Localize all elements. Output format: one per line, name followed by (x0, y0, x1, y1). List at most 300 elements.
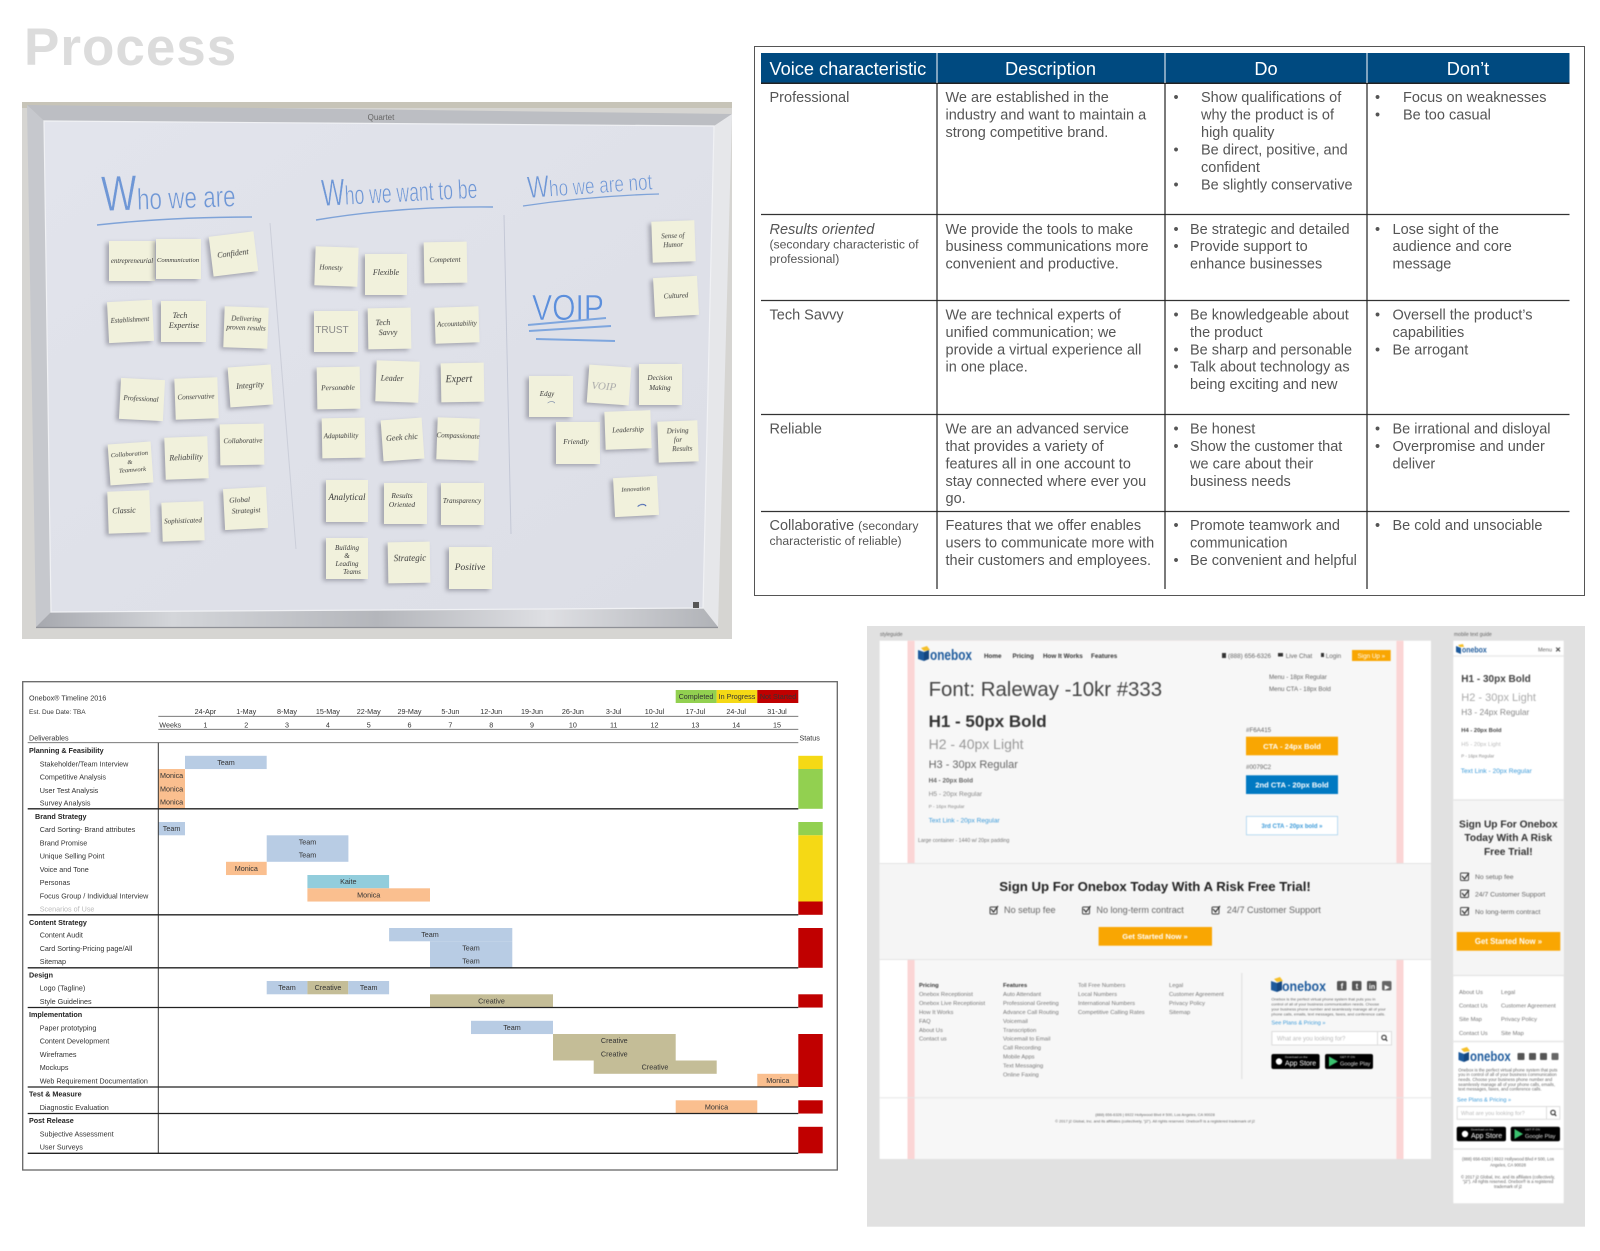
row: Professional: • (1375, 108, 1380, 124)
mobile header (1456, 644, 1561, 654)
app store badges: Download on the (1471, 1128, 1494, 1132)
row: Results oriented: message (1392, 256, 1451, 272)
date and week axis: 1-May (236, 707, 257, 716)
deliverables list: Stakeholder/Team Interview (40, 759, 129, 768)
row: Professional: We are established in the (946, 90, 1109, 106)
sticky notes: who we want to be: Analytical (328, 492, 366, 502)
menu notes (1269, 674, 1331, 693)
deliverables list: Sitemap (40, 957, 66, 966)
sticky notes: who we are not: Edgy (539, 390, 555, 398)
gantt title: Onebox® Timeline 2016 (29, 694, 106, 702)
footer links: Transcription (1003, 1028, 1036, 1034)
date and week axis: 19-Jun (521, 707, 543, 716)
mobile footer links: Site Map (1501, 1031, 1524, 1037)
sticky notes: who we are not: Results (671, 444, 693, 453)
mobile header: ✕ (1555, 647, 1561, 654)
logo: onebox (918, 646, 973, 664)
panel: desktop styleguide: styleguide (880, 632, 903, 638)
mobile brand block: you in control of all of your business communication (1458, 1072, 1557, 1077)
row: Tech Savvy: Tech Savvy (770, 308, 844, 324)
status legend (676, 690, 798, 703)
date and week axis: 6 (408, 720, 412, 730)
mobile brand block: Onebox is the perfect virtual phone system that puts (1458, 1068, 1557, 1072)
mobile footer links: Contact Us (1459, 1004, 1488, 1010)
mobile footer links: About Us (1459, 990, 1483, 996)
app store badges: GET IT ON (1525, 1128, 1540, 1132)
social icons: f (1341, 982, 1344, 991)
deliverables list: Competitive Analysis (40, 772, 106, 782)
app store badges (1457, 1127, 1560, 1141)
mobile footer links: Site Map (1459, 1017, 1482, 1023)
sticky notes: who we want to be: Competent (429, 256, 462, 264)
deliverables list: Focus Group / Individual Interview (40, 891, 149, 900)
gantt bars: Creative (601, 1049, 628, 1058)
sticky notes: who we are not: Leadership (611, 425, 644, 435)
footer links: Professional Greeting (1003, 1001, 1059, 1007)
app store badges: Google Play (1340, 1062, 1371, 1068)
date and week axis: 29-May (398, 707, 422, 716)
deliverables list: Style Guidelines (40, 997, 92, 1006)
gantt bars: Monica (705, 1102, 728, 1111)
deliverables list: Subjective Assessment (40, 1129, 114, 1138)
sticky notes: who we are: Tech (173, 311, 187, 320)
row: Reliable: • (1375, 439, 1380, 455)
deliverables list: Wireframes (40, 1050, 77, 1059)
deliverables list: Paper prototyping (40, 1023, 96, 1032)
row: Professional: industry and want to maintain a (946, 108, 1147, 124)
date and week axis: Weeks (159, 720, 182, 730)
table header row: Do (1254, 59, 1278, 79)
sticky notes: who we are: Expertise (168, 321, 200, 330)
social icons: t (1356, 982, 1359, 991)
sticky notes: who we are not: VOIP (591, 380, 617, 394)
row: Tech Savvy: Be arrogant (1392, 342, 1468, 358)
icon: checkbox (1212, 906, 1220, 914)
mobile type specimen: Text Link - 20px Regular (1461, 768, 1533, 775)
gantt bars: Team (299, 837, 316, 846)
deliverables list: Content Development (40, 1036, 109, 1046)
mobile type specimen: H3 - 24px Regular (1461, 707, 1529, 717)
mobile footer links: Contact Us (1459, 1031, 1488, 1037)
app store badges: Download on the (1285, 1055, 1308, 1059)
sticky notes: who we are not: Driving (666, 427, 689, 435)
app store badges: App Store (1471, 1133, 1502, 1140)
sticky notes: who we are: Collaboration (111, 450, 149, 459)
sticky notes: who we are: entrepreneurial (111, 258, 153, 265)
handwriting: VOIP: VOIP (532, 287, 604, 328)
mobile legal text: "j2"). All rights reserved. Onebox® is a registered (1463, 1179, 1554, 1184)
sticky notes: who we are not: ⌒ (546, 401, 556, 410)
date and week axis: 15 (773, 720, 781, 730)
row: Results oriented (770, 222, 1512, 272)
row: Reliable: features all in one account to (946, 456, 1131, 472)
footer brand block: your business phone number and seamlessly manage all of your (1271, 1006, 1386, 1011)
deliverables list: Mockups (40, 1063, 69, 1072)
row: Tech Savvy: • (1375, 342, 1380, 358)
date and week axis: 22-May (357, 707, 381, 716)
gantt bars: Creative (601, 1036, 628, 1045)
row: Professional: • (1375, 90, 1380, 106)
row: Tech Savvy (770, 308, 1532, 393)
row: Professional: why the product is of (1200, 108, 1335, 124)
row: Collaborative: Collaborative (secondary (770, 518, 919, 534)
mobile brand block: needs. Choose your business phone number and (1458, 1077, 1553, 1082)
desktop nav bar (918, 646, 1391, 664)
date and week axis: 10 (569, 720, 577, 730)
row: Tech Savvy: Talk about technology as (1190, 360, 1350, 376)
gantt bars: Creative (315, 983, 341, 992)
row: Collaborative: users to communicate more with (946, 536, 1154, 552)
status legend: Completed (679, 692, 713, 701)
row: Reliable: business needs (1190, 474, 1291, 490)
row: Results oriented: • (1375, 222, 1380, 238)
status legend: Not Started (760, 692, 796, 701)
sticky notes: who we are: & (127, 459, 134, 466)
row: Professional: high quality (1201, 125, 1275, 141)
status column (798, 756, 823, 1153)
date and week axis: 11 (610, 720, 617, 730)
mobile sign up block: No setup fee (1475, 874, 1514, 881)
panel: whiteboard photo (22, 102, 732, 639)
date and week axis: 10-Jul (645, 707, 665, 716)
sign up call to action band: 24/7 Customer Support (1227, 905, 1321, 915)
type specimen: H1 - 50px Bold (929, 712, 1047, 731)
social icons (1337, 981, 1392, 991)
footer links: Contact us (919, 1037, 947, 1043)
row: Reliable: • (1174, 439, 1179, 455)
button specimens: #F6A415 (1246, 727, 1272, 734)
type specimen: Text Link - 20px Regular (929, 818, 1001, 824)
mobile sign up block: No long-term contract (1475, 909, 1540, 916)
desktop nav bar: Sign Up » (1357, 653, 1386, 660)
row: Tech Savvy: being exciting and new (1190, 377, 1338, 393)
sticky notes: who we are not: Decision (647, 374, 673, 382)
icon: checkbox (990, 906, 998, 914)
deliverables list: Scenarios of Use (40, 904, 94, 914)
row: Collaborative: • (1174, 553, 1179, 569)
sticky notes: who we want to be: Oriented (389, 500, 415, 509)
mobile legal text: trademark of j2 (1494, 1184, 1523, 1189)
footer links: Online Faxing (1003, 1073, 1039, 1079)
gantt bars: Monica (160, 798, 183, 806)
row: Tech Savvy: Be knowledgeable about (1190, 308, 1349, 324)
mobile footer links: Legal (1501, 990, 1515, 996)
gantt due date: Est. Due Date: TBA (29, 709, 86, 716)
sticky notes: who we want to be: & (344, 552, 350, 560)
icon: checkbox (1082, 906, 1090, 914)
row: Collaborative: Promote teamwork and (1190, 518, 1340, 534)
row: Results oriented: audience and core (1392, 239, 1512, 255)
sticky notes: who we want to be: Positive (454, 563, 485, 573)
menu notes: Menu - 18px Regular (1269, 674, 1327, 681)
type specimen: H4 - 20px Bold (929, 778, 973, 784)
sticky notes: who we are: Strategist (232, 505, 262, 516)
sticky notes: who we are: Teamwork (119, 466, 147, 475)
footer links: Customer Agreement (1169, 992, 1224, 998)
row: Professional: • (1174, 90, 1179, 106)
search box: What are you looking for? (1461, 1111, 1525, 1117)
row: Reliable: that provides a variety of (946, 439, 1104, 455)
sticky notes: who we are: Professional (122, 394, 159, 404)
date and week axis (28, 707, 820, 743)
type specimen: H2 - 40px Light (929, 736, 1024, 752)
sticky notes: who we want to be: Teams (343, 568, 361, 576)
mobile sign up block: 24/7 Customer Support (1475, 892, 1545, 898)
panel: styleguide background (867, 626, 1585, 1227)
row: Results oriented: • (1174, 222, 1179, 238)
footer links: Onebox Live Receptionist (919, 1001, 985, 1007)
sign up call to action band: No setup fee (1004, 905, 1056, 915)
footer links: Local Numbers (1078, 992, 1117, 998)
icon: checkbox (1460, 908, 1469, 915)
sticky notes: who we are: Reliability (168, 452, 203, 463)
footer links: How It Works (919, 1010, 953, 1016)
legal text: © 2017 j2 Global, Inc. and its affiliates (collectively, "j2"). All rights reserved. Onebox® is a registered trademark of j2 (1055, 1118, 1255, 1124)
sign up call to action band: No long-term contract (1096, 905, 1184, 915)
date and week axis: 3 (285, 720, 289, 730)
row: Results oriented: business communications more (946, 239, 1149, 255)
date and week axis: 9 (530, 720, 534, 730)
button specimens: 2nd CTA - 20px Bold (1255, 780, 1329, 790)
sticky notes: who we are not: ⌒ (636, 503, 647, 514)
desktop nav bar: (888) 656-6326 (1228, 653, 1272, 660)
panel: project timeline gantt chart (23, 682, 837, 1170)
date and week axis: 5-Jun (441, 707, 459, 716)
footer links: Toll Free Numbers (1078, 983, 1125, 989)
sticky notes: who we want to be: Tech (375, 318, 390, 327)
mobile footer links: Privacy Policy (1501, 1017, 1537, 1023)
footer links: Text Messaging (1003, 1064, 1043, 1070)
date and week axis: 8 (489, 720, 493, 730)
search box: What are you looking for? (1277, 1036, 1346, 1042)
mobile footer links: Customer Agreement (1501, 1004, 1556, 1010)
footer links: Pricing (919, 983, 939, 989)
sticky notes: who we want to be: Strategic (394, 553, 426, 563)
desktop nav bar: Live Chat (1286, 653, 1313, 660)
gantt bars: Team (299, 850, 316, 860)
row: Professional: • (1174, 142, 1179, 158)
footer links: Voicemail to Email (1003, 1037, 1050, 1043)
mobile legal text (1461, 1156, 1555, 1189)
gantt bars: Monica (235, 864, 258, 873)
footer links: Legal (1169, 983, 1183, 989)
type specimen: H5 - 20px Regular (929, 791, 983, 798)
row: Results oriented: We provide the tools to make (946, 222, 1133, 238)
row: Professional: Be slightly conservative (1201, 178, 1353, 194)
deliverables list: Card Sorting- Brand attributes (40, 825, 136, 834)
sticky notes: who we want to be: Compassionate (436, 431, 480, 441)
type specimen: Font: Raleway -10kr #333 (929, 679, 1162, 701)
mobile brand block: See Plans & Pricing » (1457, 1098, 1511, 1104)
sticky notes: who we are not: Humor (662, 241, 683, 249)
date and week axis: 1 (203, 720, 207, 730)
deliverables list: Unique Selling Point (40, 852, 104, 860)
deliverables list: Implementation (29, 1010, 82, 1019)
mobile sign up block: Get Started Now » (1475, 937, 1542, 946)
row: Results oriented: (secondary characteristic of (770, 238, 919, 252)
footer links: Call Recording (1003, 1046, 1041, 1052)
status legend: In Progress (719, 692, 756, 701)
row: Collaborative: communication (1190, 536, 1288, 552)
sticky notes: who we want to be: Personable (320, 383, 356, 392)
deliverables list: Content Audit (40, 930, 83, 940)
deliverables list: User Test Analysis (40, 786, 99, 795)
sticky notes: who we are: Collaborative (223, 437, 262, 445)
sticky notes: who we want to be: Savvy (379, 328, 398, 337)
date and week axis: 24-Apr (195, 707, 217, 716)
mobile type specimen: H4 - 20px Bold (1461, 728, 1502, 734)
deliverables list (29, 746, 149, 1152)
deliverables list: Voice and Tone (40, 865, 89, 874)
sticky notes: who we want to be: Geek chic (386, 432, 418, 443)
sign up call to action band (880, 863, 1431, 960)
deliverables list: Logo (Tagline) (40, 984, 85, 992)
deliverables list: Diagnostic Evaluation (40, 1103, 109, 1112)
mobile header: Menu (1538, 648, 1552, 654)
gantt bars: Monica (160, 771, 183, 780)
footer links: Advance Call Routing (1003, 1010, 1059, 1016)
heading: Who we are: Who we are (100, 161, 236, 222)
gantt bars: Team (462, 943, 480, 952)
row: Collaborative: Features that we offer enables (946, 518, 1141, 534)
row: Collaborative (770, 518, 1542, 569)
row: Results oriented: enhance businesses (1190, 256, 1322, 272)
panel: mobile styleguide (1453, 632, 1564, 1203)
sticky notes: who we are: proven results (225, 323, 266, 333)
row: Professional: Be too casual (1403, 108, 1491, 124)
row: Reliable (770, 422, 1550, 507)
sticky notes: who we are not: for (674, 436, 682, 444)
deliverables list: User Surveys (40, 1142, 83, 1152)
app store badges: GET IT ON (1340, 1055, 1355, 1059)
date and week axis: Deliverables (29, 734, 69, 742)
gantt bars (158, 756, 798, 1114)
row: Reliable: Be irrational and disloyal (1392, 422, 1550, 438)
row: Tech Savvy: Be sharp and personable (1190, 342, 1352, 358)
title: Process (24, 18, 237, 77)
sticky notes: who we are: Sophisticated (164, 516, 202, 526)
deliverables list: Post Release (29, 1116, 74, 1125)
row: Collaborative: their customers and employees. (946, 553, 1151, 569)
row: Results oriented: • (1174, 239, 1179, 255)
row: Results oriented: Results oriented (770, 222, 875, 238)
footer links: Mobile Apps (1003, 1055, 1035, 1061)
table header row (761, 53, 1570, 84)
mobile brand block: text messages, faxes, and conference calls. (1458, 1086, 1542, 1092)
date and week axis: 12 (650, 720, 658, 730)
sticky notes: who we want to be: Building (335, 544, 360, 552)
heading: Who we are not: Who we are not (526, 161, 654, 205)
deliverables list: Card Sorting-Pricing page/All (40, 944, 133, 953)
sticky notes: who we want to be: Flexible (372, 268, 400, 277)
row: Reliable: Overpromise and under (1392, 439, 1545, 455)
row: Reliable: We are an advanced service (946, 422, 1129, 438)
table header row: Don’t (1447, 59, 1489, 79)
gantt bars: Team (360, 983, 377, 992)
sticky notes: who we want to be: Expert (445, 374, 473, 385)
sticky notes: who we want to be (314, 242, 492, 589)
date and week axis: 31-Jul (767, 707, 787, 716)
gantt bars: Team (278, 983, 296, 992)
row: Professional: Focus on weaknesses (1403, 90, 1546, 106)
footer links: Voicemail (1003, 1019, 1028, 1025)
mobile sign up block: Sign Up For Onebox (1459, 820, 1558, 830)
gantt bars: Kaite (340, 877, 356, 886)
footer brand block: control of all of your business communication needs. Choose (1271, 1001, 1380, 1006)
date and week axis: 7 (448, 720, 452, 730)
heading: Who we want to be: Who we want to be (320, 165, 478, 215)
row: Reliable: Show the customer that (1190, 439, 1342, 455)
footer brand block: phone calls, emails, text messages, faxes, and conference calls. (1271, 1011, 1385, 1016)
mobile brand block: seamlessly manage all of your phone calls, emails, (1458, 1082, 1555, 1087)
sticky notes: who we are: Confident (217, 247, 250, 260)
mobile footer links (1459, 990, 1556, 1037)
mobile sign up block (1453, 800, 1564, 976)
button specimens (1246, 727, 1338, 835)
row: Results oriented: Lose sight of the (1392, 222, 1499, 238)
sign up call to action band: Get Started Now » (1122, 932, 1188, 941)
mobile type specimen: H1 - 30px Bold (1461, 674, 1531, 685)
panel: mobile styleguide: mobile text guide (1454, 632, 1492, 638)
mobile brand block (1457, 1047, 1560, 1141)
desktop nav bar: Features (1091, 653, 1118, 660)
app store badges (1271, 1054, 1373, 1069)
sticky notes: who we are not: Friendly (562, 437, 589, 446)
date and week axis: 5 (367, 720, 371, 730)
mobile type specimen (1461, 674, 1536, 775)
sign up call to action band: Sign Up For Onebox Today With A Risk Free Trial! (999, 879, 1311, 894)
deliverables list: Brand Promise (40, 838, 87, 847)
gantt bars: Creative (478, 996, 505, 1005)
icon: checkbox (1460, 890, 1469, 898)
row: Professional: Show qualifications of (1201, 90, 1342, 106)
app store badges: Google Play (1525, 1134, 1556, 1140)
gantt bars: Monica (357, 890, 380, 899)
row: Reliable: • (1375, 422, 1380, 438)
row: Reliable: • (1174, 422, 1179, 438)
row: Tech Savvy: • (1174, 342, 1179, 358)
logo: onebox: onebox (930, 647, 973, 664)
type specimen: H3 - 30px Regular (929, 759, 1018, 771)
button specimens: CTA - 24px Bold (1263, 742, 1321, 751)
logo: onebox: onebox (1282, 978, 1326, 994)
legal text: (888) 656-6326 | 6922 Hollywood Blvd # 500, Los Angeles, CA 90028 (1095, 1112, 1215, 1117)
row: Tech Savvy: • (1174, 308, 1179, 324)
row: Reliable: Be honest (1190, 422, 1255, 438)
row: Professional: Be direct, positive, and (1201, 142, 1348, 158)
row: Results oriented: Be strategic and detailed (1190, 222, 1350, 238)
date and week axis: 2 (244, 720, 248, 730)
gantt bars: Monica (160, 784, 183, 793)
sticky notes: who we are: Integrity (235, 380, 264, 391)
deliverables list: Survey Analysis (40, 798, 91, 808)
footer links: Competitive Calling Rates (1078, 1010, 1145, 1016)
mobile header: onebox (1462, 646, 1487, 654)
row: Tech Savvy: in one place. (946, 360, 1028, 376)
row: Results oriented: Provide support to (1190, 239, 1308, 255)
row: Reliable: stay connected where ever you (946, 474, 1146, 490)
deliverables list: Web Requirement Documentation (40, 1076, 148, 1085)
mobile sign up block: Today With A Risk (1464, 833, 1553, 844)
footer links (919, 983, 1224, 1079)
sticky notes: who we are: Classic (112, 506, 136, 516)
row: Tech Savvy: • (1174, 360, 1179, 376)
panel: desktop styleguide (880, 632, 1431, 1159)
type specimen (918, 679, 1162, 844)
footer brand block (1271, 977, 1392, 1069)
deliverables list: Planning & Feasibility (29, 746, 104, 755)
footer links: Sitemap (1169, 1010, 1190, 1016)
